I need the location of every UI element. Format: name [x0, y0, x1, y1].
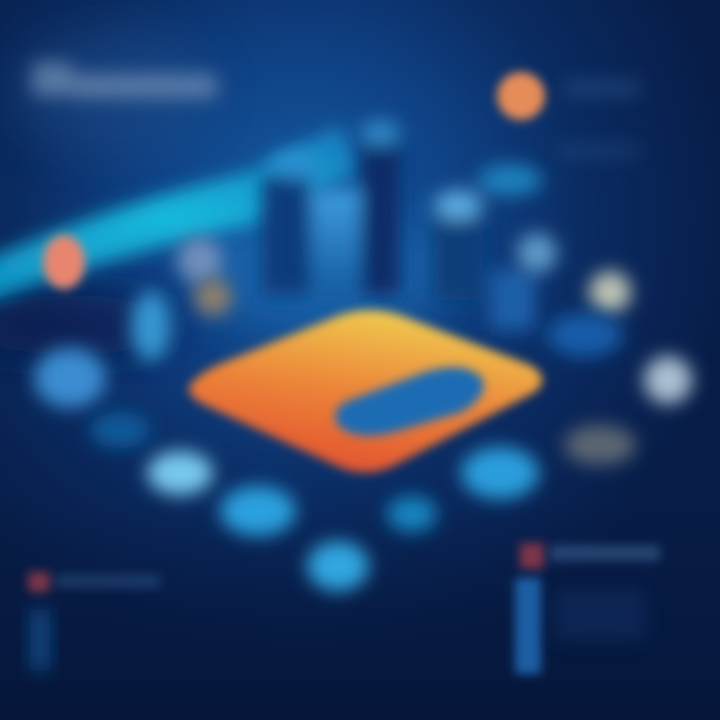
roof glow: left [271, 151, 319, 179]
node: left large blue [34, 348, 106, 408]
building top: centre [360, 120, 400, 146]
dark strip under swoosh [0, 295, 180, 355]
bottom-left legend [28, 572, 160, 670]
top-right text block [560, 80, 640, 156]
lower dark fade [0, 500, 720, 720]
building top: light [434, 190, 482, 220]
building: tall dark [362, 130, 400, 295]
node: blue panel right [547, 313, 623, 357]
upper-left haze [10, 30, 210, 150]
building: mid [435, 200, 483, 300]
node: blue capsule [131, 291, 171, 361]
node: cyan ellipse 3 [307, 541, 369, 591]
node: cyan ellipse 4 [387, 496, 437, 532]
node: cyan ellipse 5 [461, 447, 539, 499]
node: cyan ellipse 2 [220, 486, 296, 536]
building: far left [262, 175, 310, 295]
building: right small [490, 270, 535, 330]
diamond inner pill [335, 367, 484, 436]
node: cyan ellipse 1 [147, 451, 213, 495]
node: left lower blue [90, 412, 150, 448]
roof glow: right [478, 164, 542, 196]
node: light grey circle [644, 356, 692, 404]
glow behind buildings [200, 210, 460, 330]
legend column: blue [30, 610, 50, 670]
legend text bar [550, 545, 660, 561]
icon: salmon circle [43, 235, 85, 289]
cyan swoosh band [0, 125, 360, 305]
title block [32, 62, 217, 98]
central diamond card [189, 310, 542, 472]
bottom-right legend [515, 543, 660, 674]
legend lines [555, 590, 645, 640]
node: lavender circle [177, 237, 223, 283]
legend marker: red [520, 543, 544, 569]
icon: orange circle [497, 72, 545, 120]
legend column: blue [515, 578, 541, 674]
node: light blue circle right [517, 233, 557, 273]
node: brown circle [194, 278, 232, 316]
building cluster [262, 120, 542, 330]
legend text bar [55, 574, 160, 588]
node: cream circle [589, 271, 631, 313]
building: light blue [312, 190, 360, 295]
legend marker: red [28, 572, 50, 592]
node: grey-brown ellipse [564, 425, 636, 465]
